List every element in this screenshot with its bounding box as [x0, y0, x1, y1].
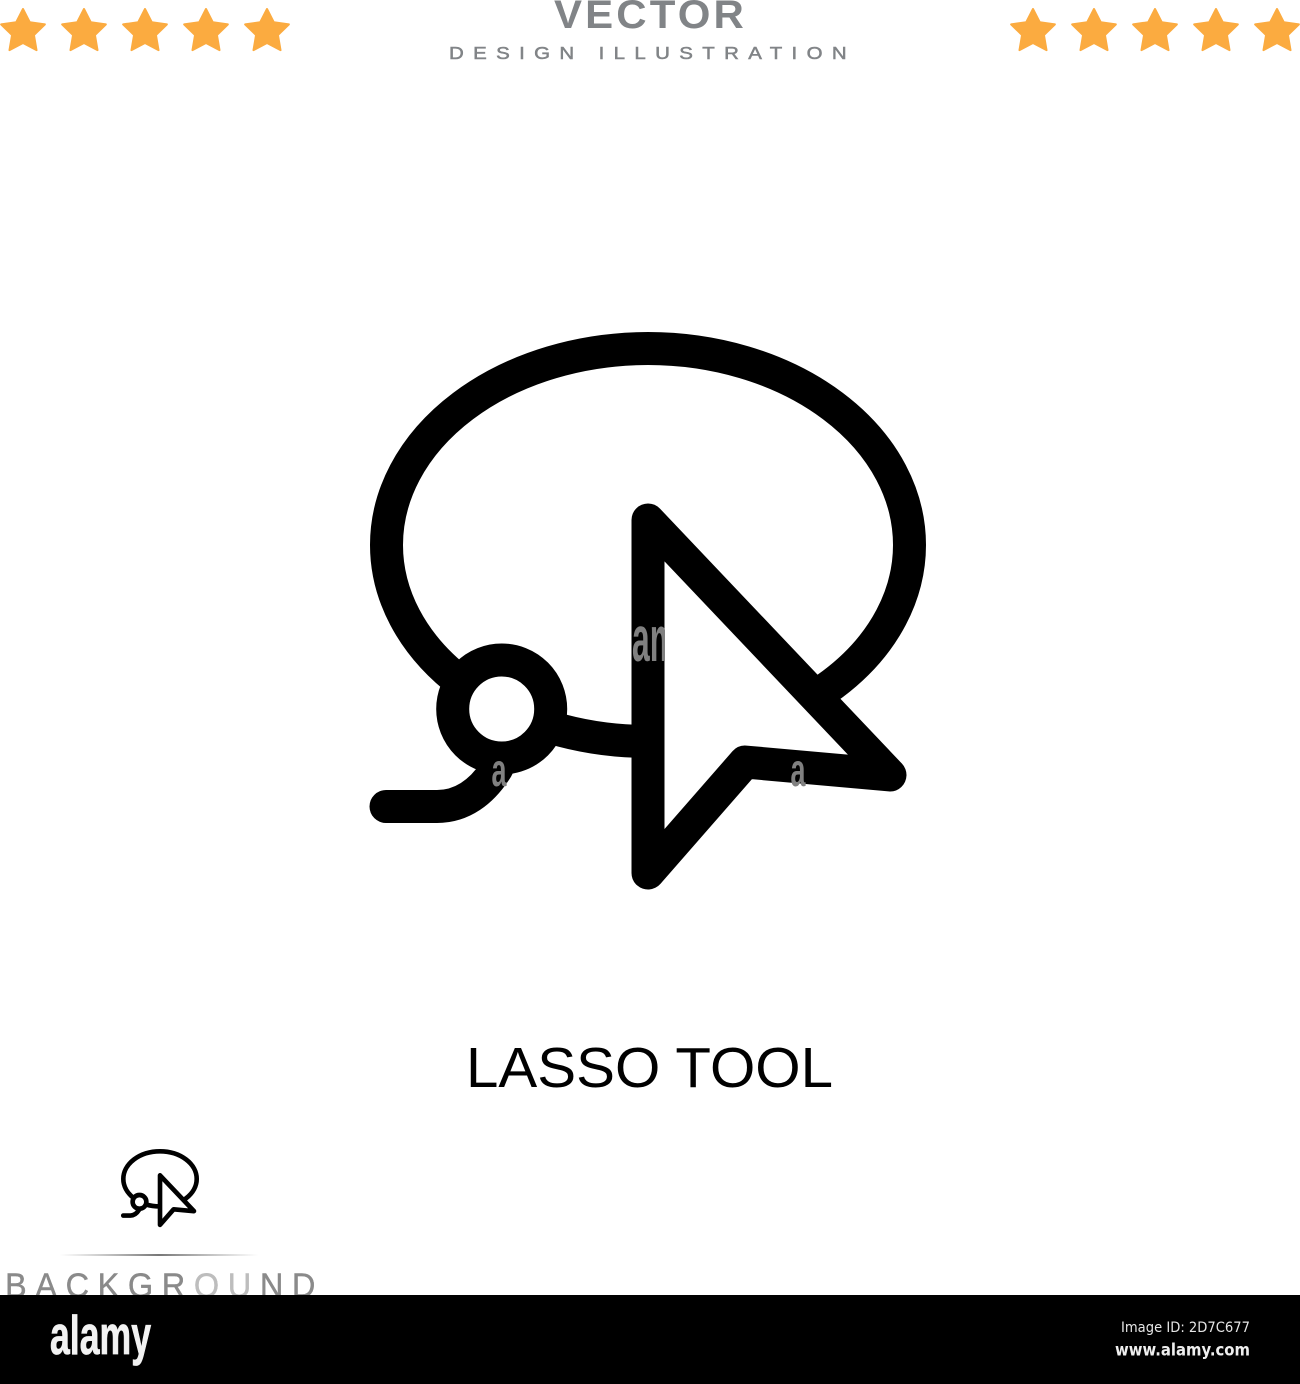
- icon: large lasso tool: [386, 348, 910, 873]
- watermark fragment on tail: a: [492, 744, 507, 796]
- icon: five stars right: [1011, 9, 1299, 50]
- icon: small lasso tool: [123, 1151, 197, 1225]
- logo: alamy: alamy: [50, 1304, 151, 1366]
- subheading: DESIGN ILLUSTRATION: DESIGN ILLUSTRATION: [449, 43, 856, 63]
- text: am: [632, 603, 678, 675]
- footer bar: [0, 1295, 1300, 1384]
- watermark fragment on cursor tail: a: [790, 744, 806, 796]
- website: www.alamy.com: [1115, 1340, 1250, 1360]
- icon: five stars left: [1, 9, 289, 50]
- title: LASSO TOOL: LASSO TOOL: [466, 1036, 833, 1100]
- image id: Image ID: 2D7C677: [1121, 1320, 1250, 1336]
- label: BACKGROUND: BACKGROUND: [5, 1267, 324, 1305]
